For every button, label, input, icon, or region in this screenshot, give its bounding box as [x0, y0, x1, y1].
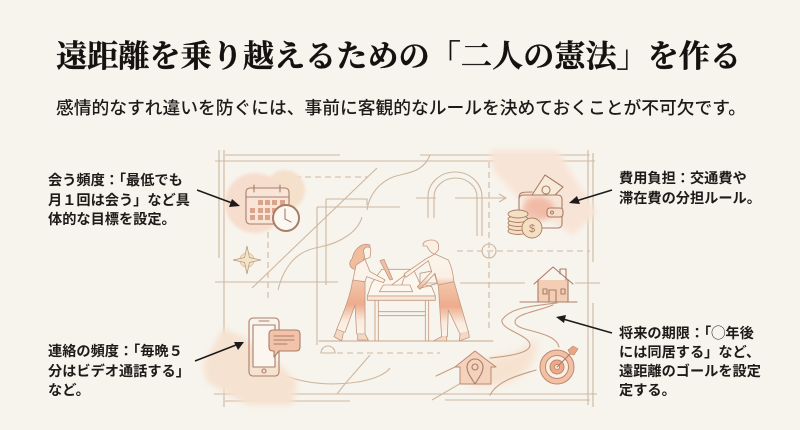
callout: contact frequency: 分はビデオ通話する」 [48, 363, 190, 380]
callout: contact frequency: 連絡の頻度：「毎晩５ [48, 343, 183, 360]
callout: meeting frequency: 月１回は会う」など具 [48, 193, 190, 209]
icon: home location pin [455, 351, 496, 384]
icon: smartphone and chat bubble [203, 318, 300, 405]
callout: future deadline: 遠距離のゴールを設定 [619, 363, 761, 380]
icon: calendar and clock [225, 170, 305, 233]
callout: meeting frequency [48, 173, 190, 228]
callout: cost sharing: 滞在費の分担ルール。 [619, 190, 761, 207]
arrow: to phone [195, 342, 244, 361]
icon: blueprint arch with arrow [416, 172, 506, 258]
illustration: couple at drafting table [319, 240, 493, 341]
icon: wallet and coins [490, 150, 597, 238]
woman [334, 244, 393, 341]
road [436, 303, 559, 395]
table [367, 269, 437, 341]
icon: wallet and coins: $ [529, 223, 535, 235]
icon: compass [233, 246, 261, 274]
callout: cost sharing [619, 170, 761, 207]
callout: meeting frequency: 体的な目標を設定。 [48, 211, 176, 228]
arrow: to calendar [197, 190, 240, 207]
arrow: to house road [556, 315, 612, 333]
callout: future deadline: 将来の期限：「◯年後 [619, 325, 754, 342]
callout: meeting frequency: 会う頻度：「最低でも [48, 173, 183, 189]
icon: target with arrow [540, 346, 578, 384]
arrow: to wallet [569, 190, 612, 204]
subtitle: 感情的なすれ違いを防ぐには、事前に客観的なルールを決めておくことが不可欠です。 [56, 97, 746, 118]
title: 遠距離を乗り越えるための「二人の憲法」を作る [56, 39, 741, 74]
callout: future deadline [619, 325, 761, 399]
callout: future deadline: 定する。 [619, 383, 676, 399]
callout: contact frequency [48, 343, 190, 399]
icon: house on road [520, 267, 577, 302]
man [404, 240, 469, 341]
callout: cost sharing: 費用負担：交通費や [619, 170, 747, 187]
callout: future deadline: には同居する」など、 [619, 345, 760, 361]
callout: contact frequency: など。 [48, 383, 90, 399]
